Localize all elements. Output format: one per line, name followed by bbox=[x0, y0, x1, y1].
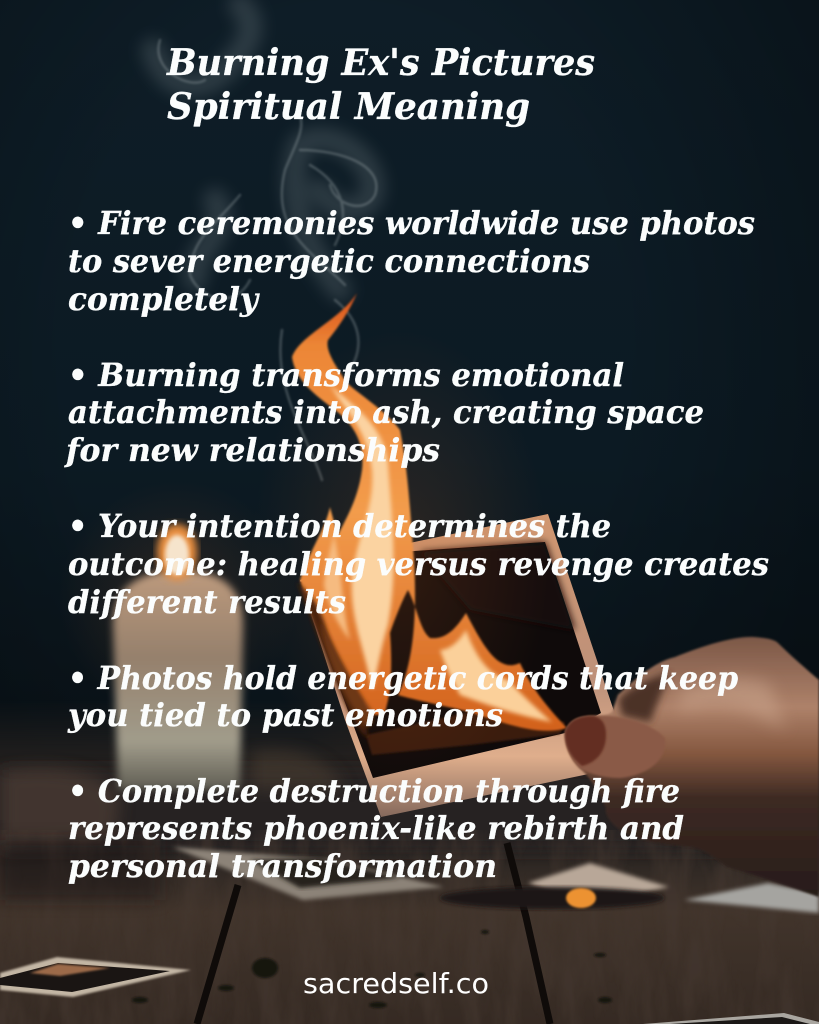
title: Burning Ex's Pictures bbox=[166, 42, 595, 84]
footer website: sacredself.co bbox=[303, 967, 489, 1000]
flames bbox=[250, 293, 567, 790]
candle bbox=[58, 480, 298, 790]
ash debris bbox=[132, 930, 612, 1008]
hand holding photo bbox=[565, 637, 819, 897]
bullet 3: • Your intention determines the bbox=[68, 507, 611, 545]
charred left edge bbox=[297, 582, 368, 738]
bullet 4 bbox=[67, 659, 738, 734]
bullet 5: • Complete destruction through fire bbox=[68, 772, 680, 810]
bullet 4: you tied to past emotions bbox=[67, 696, 503, 734]
bullet 5: personal transformation bbox=[68, 847, 497, 885]
smoke bbox=[153, 5, 376, 480]
thumb with nail bbox=[565, 716, 665, 778]
bullet 3 bbox=[68, 507, 769, 621]
title: Spiritual Meaning bbox=[167, 86, 530, 128]
bullet 2 bbox=[64, 356, 704, 469]
plank gaps bbox=[197, 843, 550, 1024]
bullet 2: • Burning transforms emotional bbox=[68, 356, 624, 394]
bullet 2: for new relationships bbox=[64, 431, 440, 469]
polaroid photo frame bbox=[300, 514, 632, 817]
bullet 3: different results bbox=[68, 583, 346, 621]
bullet 1: completely bbox=[68, 280, 260, 318]
blurred photos on the table bbox=[172, 847, 444, 900]
bullet 5 bbox=[68, 772, 684, 885]
small photo, lower left bbox=[0, 957, 191, 997]
bullet 3: outcome: healing versus revenge creates bbox=[68, 545, 769, 583]
bullet 1: • Fire ceremonies worldwide use photos bbox=[68, 204, 755, 242]
bullet 1 bbox=[68, 204, 755, 318]
bullet 2: attachments into ash, creating space bbox=[68, 393, 704, 431]
title bbox=[166, 42, 595, 128]
bullet 4: • Photos hold energetic cords that keep bbox=[68, 659, 738, 697]
bullet 1: to sever energetic connections bbox=[68, 242, 590, 280]
bullet 5: represents phoenix-like rebirth and bbox=[68, 809, 684, 847]
wooden table bbox=[0, 700, 819, 1024]
